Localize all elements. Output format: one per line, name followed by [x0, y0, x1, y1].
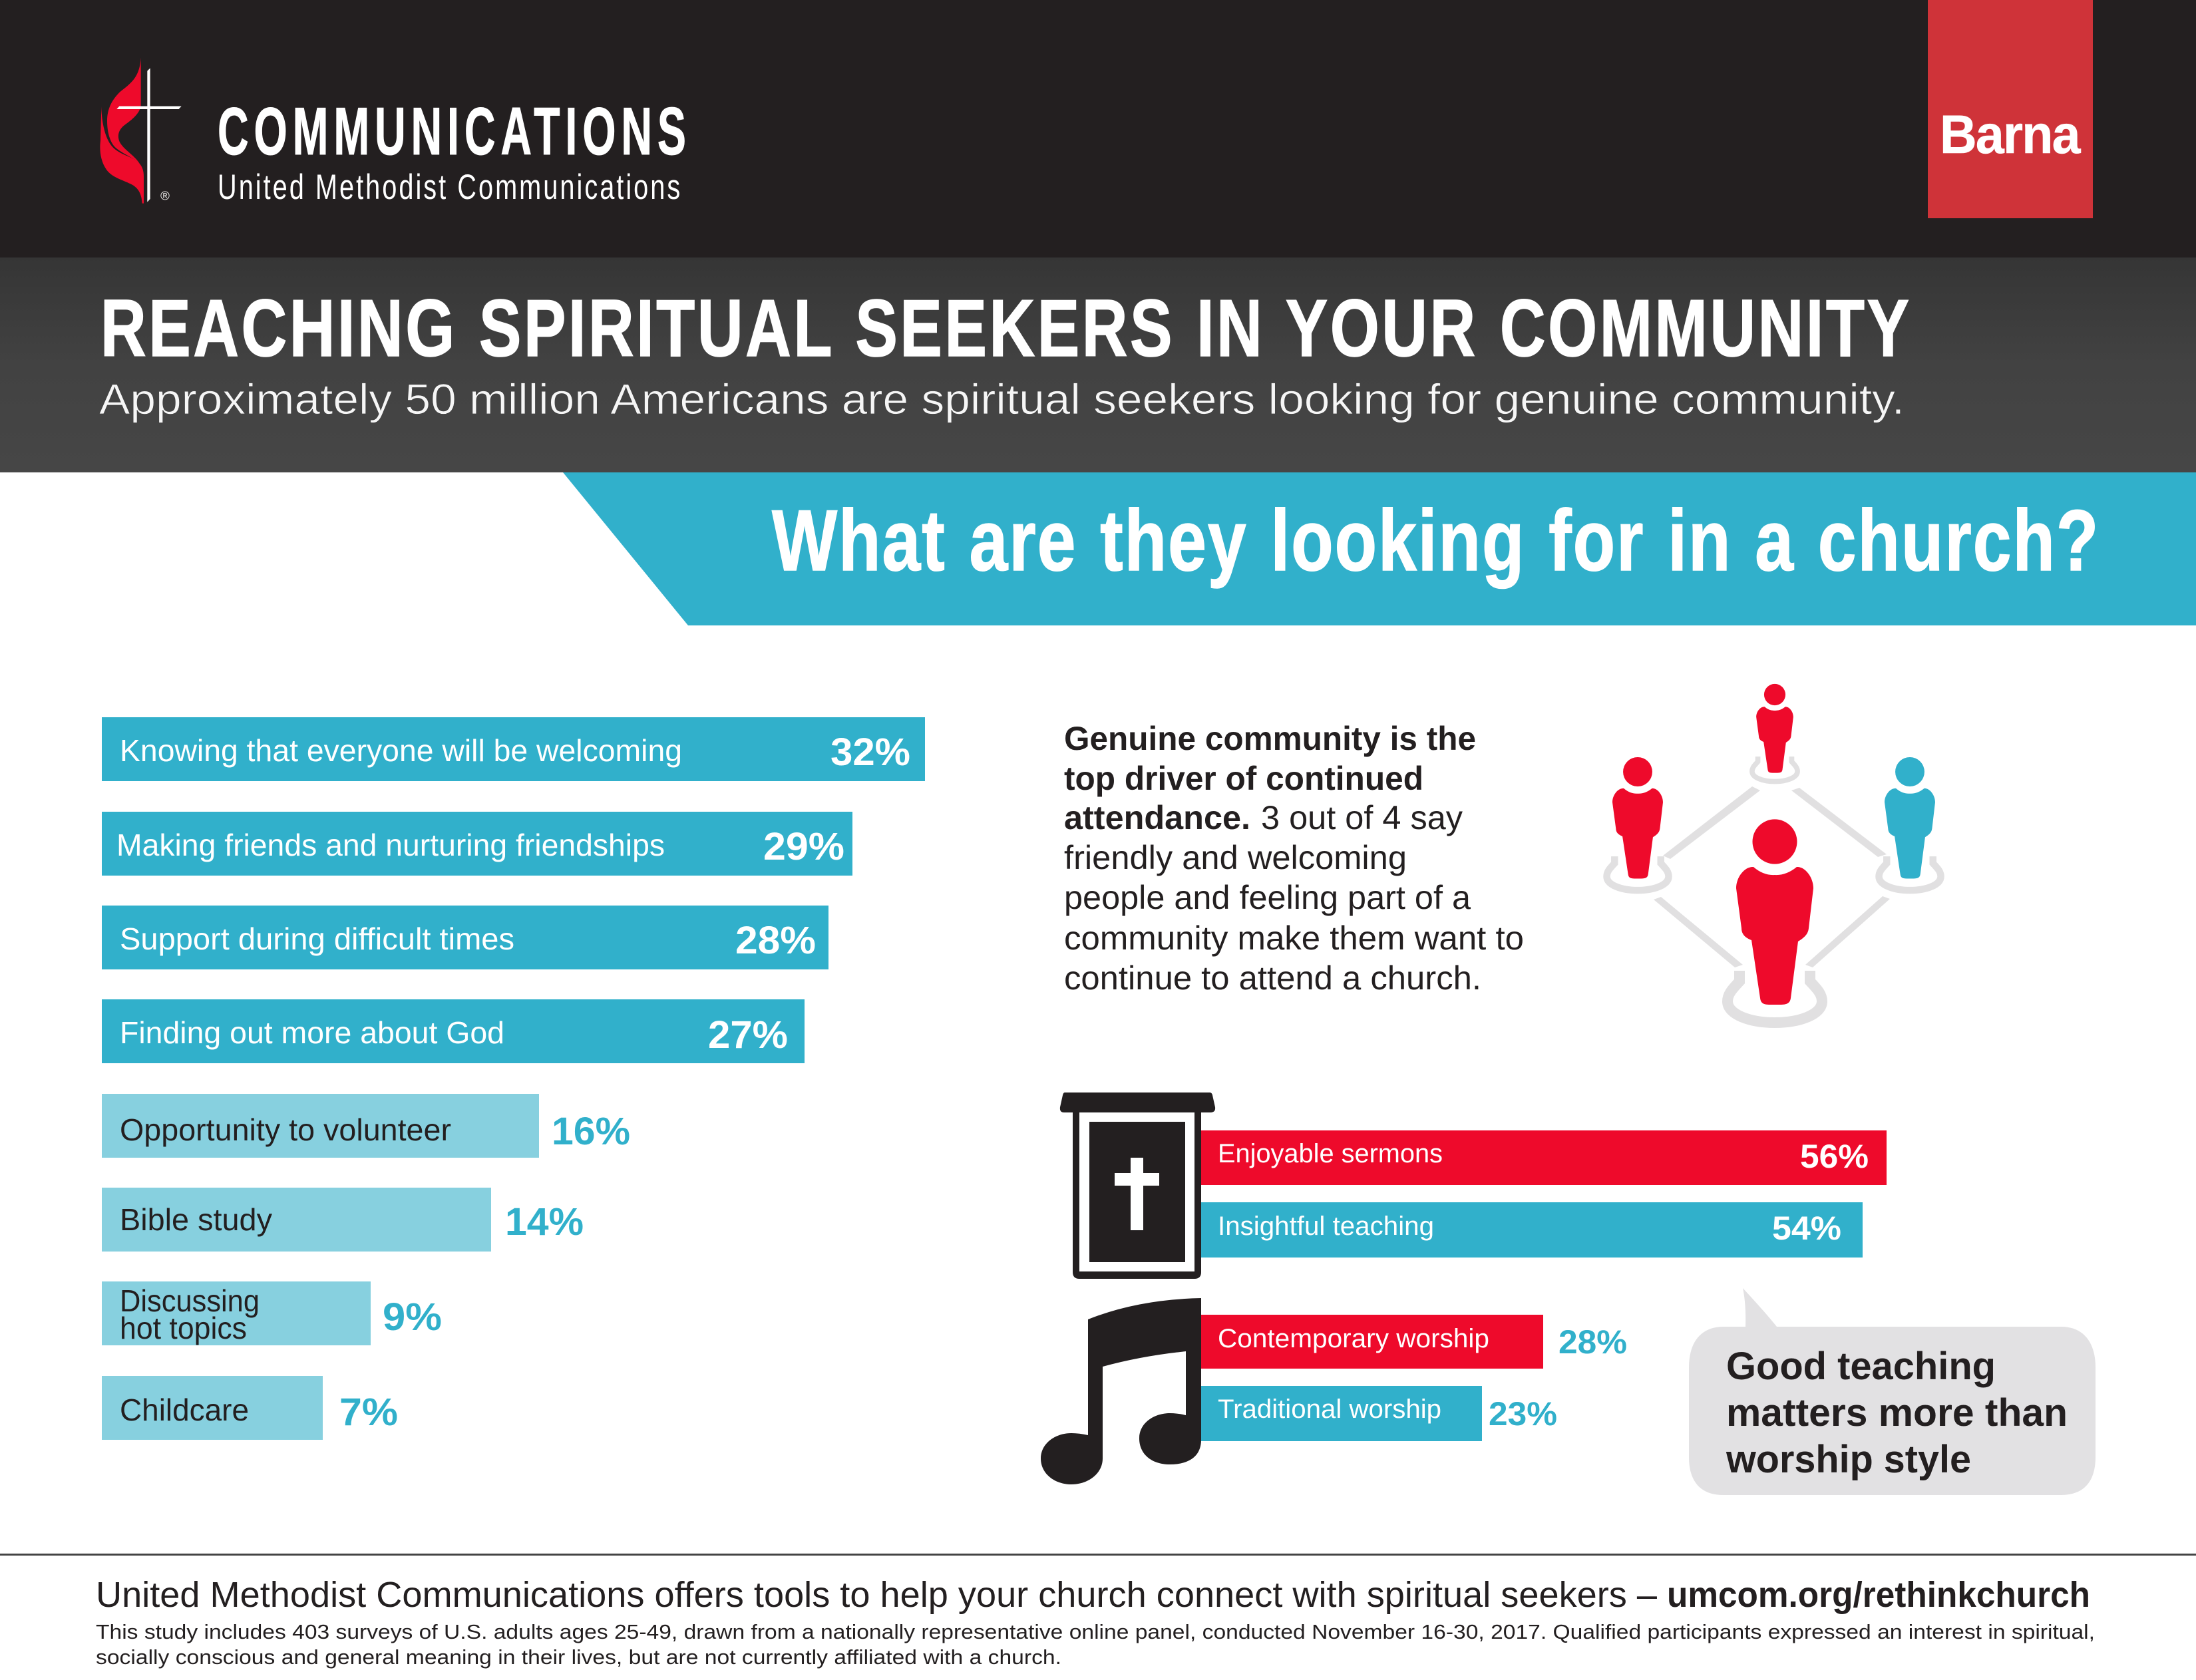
bar chart: what seekers look for	[102, 717, 925, 1440]
footnote: socially conscious and general meaning in their lives, but are not currently affiliated with a church.	[96, 1645, 1061, 1669]
bar: volunteer 16%	[102, 1094, 630, 1158]
bar: childcare 7%: 7%	[339, 1391, 398, 1434]
bar: contemporary worship 28%: Contemporary worship	[1218, 1324, 1489, 1353]
bar chart: worship style	[1201, 1315, 1627, 1441]
icon: person top	[1752, 684, 1797, 782]
callout: good teaching	[1689, 1288, 2096, 1495]
icon: person front	[1728, 819, 1822, 1023]
panel: top header	[0, 0, 2196, 257]
logo wordmark: COMMUNICATIONS	[218, 93, 686, 168]
bar: welcoming 32%: Knowing that everyone will be welcoming	[120, 733, 682, 768]
title: REACHING SPIRITUAL SEEKERS IN YOUR COMMUNITY	[100, 283, 1911, 374]
text block: genuine community: Genuine community is the	[1064, 720, 1476, 757]
bar chart: sermons and teaching	[1201, 1130, 1887, 1258]
bar: traditional worship 23%: Traditional worship	[1218, 1395, 1441, 1424]
bar: difficult times 28%: 28%	[735, 919, 816, 962]
panel: title band	[0, 257, 2196, 472]
icon: music notes	[1041, 1298, 1201, 1484]
text block: genuine community: friendly and welcoming	[1064, 839, 1407, 876]
bar: hot topics 9%: 9%	[383, 1295, 442, 1339]
bar: about God 27%: Finding out more about God	[120, 1015, 504, 1050]
icon: cross and flame logo	[100, 58, 182, 204]
callout: good teaching: worship style	[1726, 1438, 1971, 1481]
text block: genuine community	[1064, 720, 1524, 997]
bar: contemporary worship 28%	[1201, 1315, 1627, 1369]
bar: contemporary worship 28%: 28%	[1558, 1323, 1627, 1361]
footnote: This study includes 403 surveys of U.S. adults ages 25-49, drawn from a nationally representative online panel, conducted November 16-30, 2017. Qualified participants expressed an interest in spiritual,	[96, 1620, 2095, 1643]
bar: Bible study 14%: 14%	[505, 1200, 584, 1244]
logo subtitle: United Methodist Communications	[218, 167, 680, 206]
bar: hot topics 9%: Discussing	[120, 1283, 260, 1318]
text block: genuine community: people and feeling part of a	[1064, 879, 1471, 916]
icon: person left	[1606, 757, 1669, 890]
bar: enjoyable sermons 56%: 56%	[1800, 1138, 1869, 1175]
bar: Bible study 14%: Bible study	[120, 1202, 272, 1237]
bar: volunteer 16%: Opportunity to volunteer	[120, 1112, 451, 1147]
callout: good teaching: Good teaching	[1726, 1345, 1996, 1388]
bar: insightful teaching 54%: Insightful teaching	[1218, 1212, 1434, 1241]
icon: pulpit with cross	[1060, 1092, 1215, 1279]
text block: genuine community: continue to attend a church.	[1064, 959, 1481, 997]
bar: childcare 7%: Childcare	[120, 1393, 249, 1427]
text block: genuine community: top driver of continued	[1064, 760, 1423, 797]
bar: friendships 29%: 29%	[763, 825, 844, 868]
section banner	[563, 472, 2196, 625]
callout: good teaching: matters more than	[1726, 1391, 2068, 1434]
icon: cross and flame logo: ®	[160, 188, 170, 202]
bar: hot topics 9%: hot topics	[120, 1311, 247, 1345]
bar: difficult times 28%	[102, 906, 828, 969]
bar: volunteer 16%: 16%	[552, 1110, 630, 1153]
section banner: What are they looking for in a church?	[772, 492, 2100, 589]
footer call to action: United Methodist Communications offers tools to help your church connect with spiritual seekers –	[96, 1575, 1657, 1615]
bar: insightful teaching 54%: 54%	[1772, 1210, 1841, 1247]
bar: difficult times 28%: Support during difficult times	[120, 922, 514, 956]
panel: footer	[0, 1554, 2196, 1669]
bar: friendships 29%: Making friends and nurturing friendships	[116, 828, 665, 862]
footer call to action: umcom.org/rethinkchurch	[1667, 1575, 2090, 1615]
icon: connected people network	[1606, 684, 1941, 1023]
footnote	[96, 1620, 2095, 1669]
bar: childcare 7%	[102, 1376, 398, 1440]
icon: person right	[1879, 757, 1941, 890]
bar: welcoming 32%: 32%	[830, 731, 910, 774]
bar: about God 27%	[102, 999, 805, 1063]
bar: about God 27%: 27%	[708, 1013, 788, 1057]
bar: hot topics 9%	[102, 1281, 442, 1345]
bar: enjoyable sermons 56%: Enjoyable sermons	[1218, 1139, 1443, 1168]
Barna logo	[1928, 0, 2093, 218]
Barna logo: Barna	[1940, 104, 2081, 165]
text block: genuine community: community make them want to	[1064, 920, 1524, 957]
subtitle: Approximately 50 million Americans are spiritual seekers looking for genuine community.	[99, 375, 1905, 423]
bar: enjoyable sermons 56%	[1201, 1130, 1887, 1185]
bar: Bible study 14%	[102, 1188, 584, 1252]
bar: insightful teaching 54%	[1201, 1202, 1863, 1258]
bar: traditional worship 23%	[1201, 1386, 1557, 1441]
text block: genuine community: 3 out of 4 say	[1261, 799, 1463, 836]
bar: traditional worship 23%: 23%	[1489, 1395, 1557, 1432]
text block: genuine community: attendance.	[1064, 799, 1250, 836]
bar: friendships 29%	[102, 812, 852, 876]
bar: welcoming 32%	[102, 717, 925, 781]
